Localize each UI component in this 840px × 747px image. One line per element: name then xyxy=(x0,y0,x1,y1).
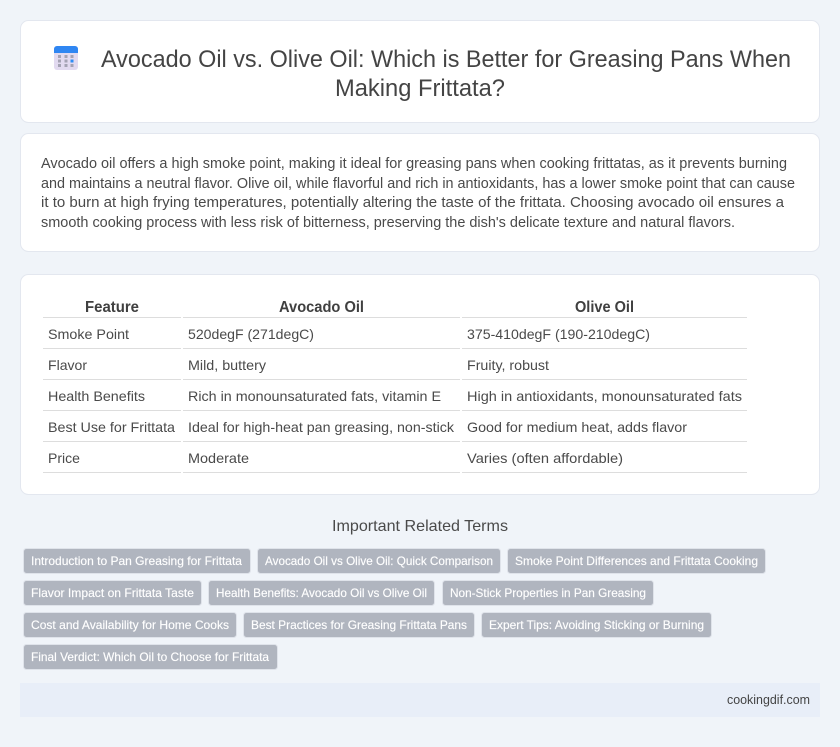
table row: smoke point: 520degF (271degC) xyxy=(188,326,314,342)
table row: smoke point xyxy=(48,326,650,342)
text block: summary xyxy=(41,156,795,231)
panel: comparison table xyxy=(20,274,820,494)
tag xyxy=(208,580,434,606)
table header: Olive Oil xyxy=(575,299,634,316)
table row: smoke point: Smoke Point xyxy=(48,326,129,342)
table row: flavor: Fruity, robust xyxy=(467,357,549,373)
heading: related terms: Important Related Terms xyxy=(332,518,508,535)
tag: Expert Tips: Avoiding Sticking or Burning xyxy=(489,618,704,632)
tag xyxy=(24,548,250,574)
tag: Non-Stick Properties in Pan Greasing xyxy=(450,586,646,600)
text block: summary: and maintains a neutral flavor. Olive oil, while flavorful and rich in antioxidants, has a lower smoke point that can cause xyxy=(41,176,795,192)
text block: summary: it to burn at high frying temperatures, potentially altering the taste of the frittata. Choosing avocado oil ensures a xyxy=(41,195,784,211)
tag: Introduction to Pan Greasing for Frittata xyxy=(31,554,242,568)
tag: Avocado Oil vs Olive Oil: Quick Comparison xyxy=(265,554,493,568)
title: Making Frittata? xyxy=(335,75,505,102)
table row: best use: Ideal for high-heat pan greasing, non-stick xyxy=(188,419,455,435)
table row: health benefits: Rich in monounsaturated fats, vitamin E xyxy=(188,388,441,404)
title xyxy=(101,46,791,102)
table row: best use: Best Use for Frittata xyxy=(48,419,175,435)
table row: health benefits xyxy=(48,388,742,404)
table row: health benefits: High in antioxidants, monounsaturated fats xyxy=(467,388,742,404)
tag xyxy=(24,644,278,670)
tag: Smoke Point Differences and Frittata Cooking xyxy=(515,554,758,568)
table row: price: Moderate xyxy=(188,450,249,466)
footer: cookingdif.com xyxy=(727,692,810,707)
tag xyxy=(244,612,474,638)
tag xyxy=(24,612,236,638)
panel: summary paragraph xyxy=(20,134,820,252)
tag: Flavor Impact on Frittata Taste xyxy=(31,586,194,600)
panel: title card xyxy=(20,20,820,122)
table row: price: Varies (often affordable) xyxy=(467,450,623,466)
table row: flavor xyxy=(48,357,549,373)
text block: summary: smooth cooking process with less risk of bitterness, preserving the dish's delicate texture and natural flavors. xyxy=(41,215,735,231)
tag xyxy=(24,580,202,606)
table row: price xyxy=(48,450,623,466)
tag: Final Verdict: Which Oil to Choose for Frittata xyxy=(31,650,269,664)
table header: Avocado Oil xyxy=(279,299,364,316)
tag xyxy=(508,548,766,574)
tag: Health Benefits: Avocado Oil vs Olive Oil xyxy=(216,586,427,600)
table header: Feature xyxy=(85,299,139,316)
table row: best use: Good for medium heat, adds flavor xyxy=(467,419,687,435)
footer xyxy=(20,683,820,717)
table header xyxy=(85,299,634,316)
table row: health benefits: Health Benefits xyxy=(48,388,145,404)
tag: Best Practices for Greasing Frittata Pans xyxy=(251,618,467,632)
table row: flavor: Flavor xyxy=(48,357,87,373)
table row: best use xyxy=(48,419,687,435)
related term tags xyxy=(24,548,766,670)
tag xyxy=(482,612,712,638)
table row: price: Price xyxy=(48,450,80,466)
icon: calendar xyxy=(54,46,78,70)
table row: flavor: Mild, buttery xyxy=(188,357,266,373)
tag: Cost and Availability for Home Cooks xyxy=(31,618,229,632)
text block: summary: Avocado oil offers a high smoke point, making it ideal for greasing pans when cooking frittatas, as it prevents burning xyxy=(41,156,787,172)
table row: smoke point: 375-410degF (190-210degC) xyxy=(467,326,650,342)
tag xyxy=(258,548,500,574)
title: Avocado Oil vs. Olive Oil: Which is Better for Greasing Pans When xyxy=(101,46,791,73)
tag xyxy=(442,580,654,606)
